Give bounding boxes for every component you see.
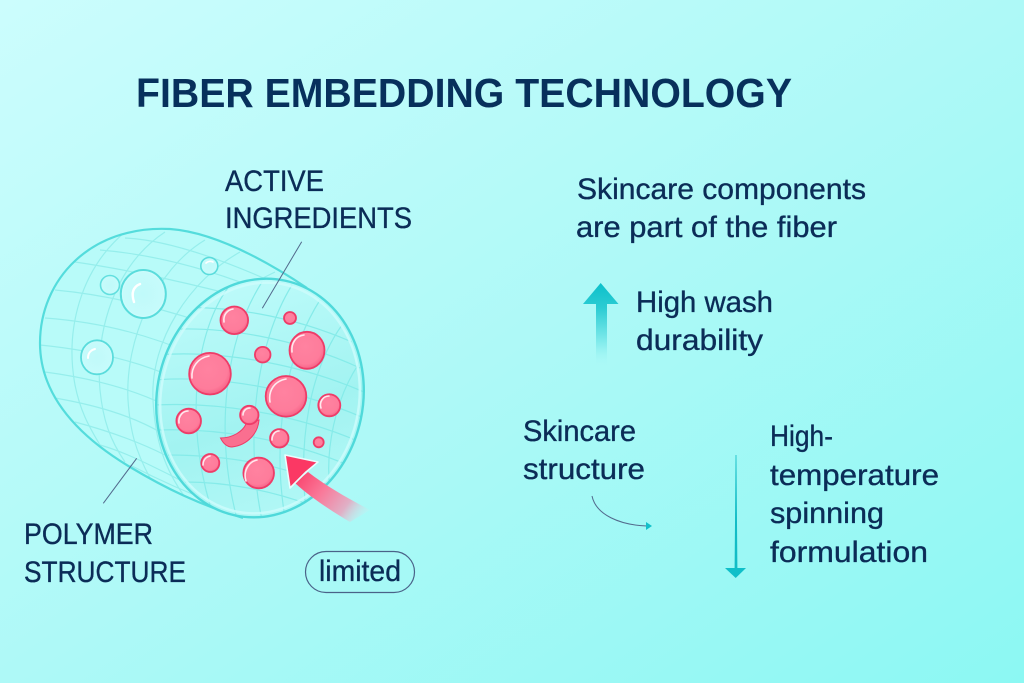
leader line: active ingredients: [262, 242, 302, 308]
title: FIBER EMBEDDING TECHNOLOGY: [136, 70, 792, 116]
text: high-temperature spinning formulation: spinning: [770, 497, 884, 530]
text: high-temperature spinning formulation: temperature: [770, 459, 939, 492]
arrow: curved: [592, 496, 652, 530]
text: high-temperature spinning formulation: [770, 420, 939, 569]
arrow: down: [725, 455, 746, 578]
label: polymer structure: POLYMER: [24, 518, 153, 551]
text: skincare structure: structure: [523, 453, 645, 486]
pink active ingredient droplets: [176, 306, 340, 488]
text: high-temperature spinning formulation: High-: [770, 420, 833, 453]
text: high wash durability: High wash: [636, 286, 773, 319]
text: high wash durability: [636, 286, 773, 357]
cylinder front face: [155, 278, 365, 518]
pill label: limited: limited: [319, 555, 401, 588]
arrow: up: [583, 283, 618, 366]
leader line: polymer structure: [103, 458, 137, 503]
pink arrow: [285, 455, 370, 522]
cylinder body: [40, 229, 307, 518]
text: high wash durability: durability: [636, 324, 763, 357]
label: polymer structure: [24, 518, 186, 589]
text: skincare structure: Skincare: [523, 415, 636, 448]
text: skincare structure: [523, 415, 645, 486]
text: skincare components: are part of the fiber: [576, 211, 837, 244]
pill label: limited: [306, 552, 414, 592]
label: active ingredients: ACTIVE: [225, 165, 324, 198]
fiber cylinder illustration: [40, 229, 386, 537]
teal bubbles: [81, 258, 218, 374]
label: active ingredients: [225, 165, 412, 235]
text: skincare components: Skincare components: [577, 173, 866, 206]
text: skincare components: [576, 173, 866, 244]
label: active ingredients: INGREDIENTS: [225, 202, 412, 235]
text: high-temperature spinning formulation: formulation: [770, 536, 928, 569]
label: polymer structure: STRUCTURE: [24, 556, 186, 589]
